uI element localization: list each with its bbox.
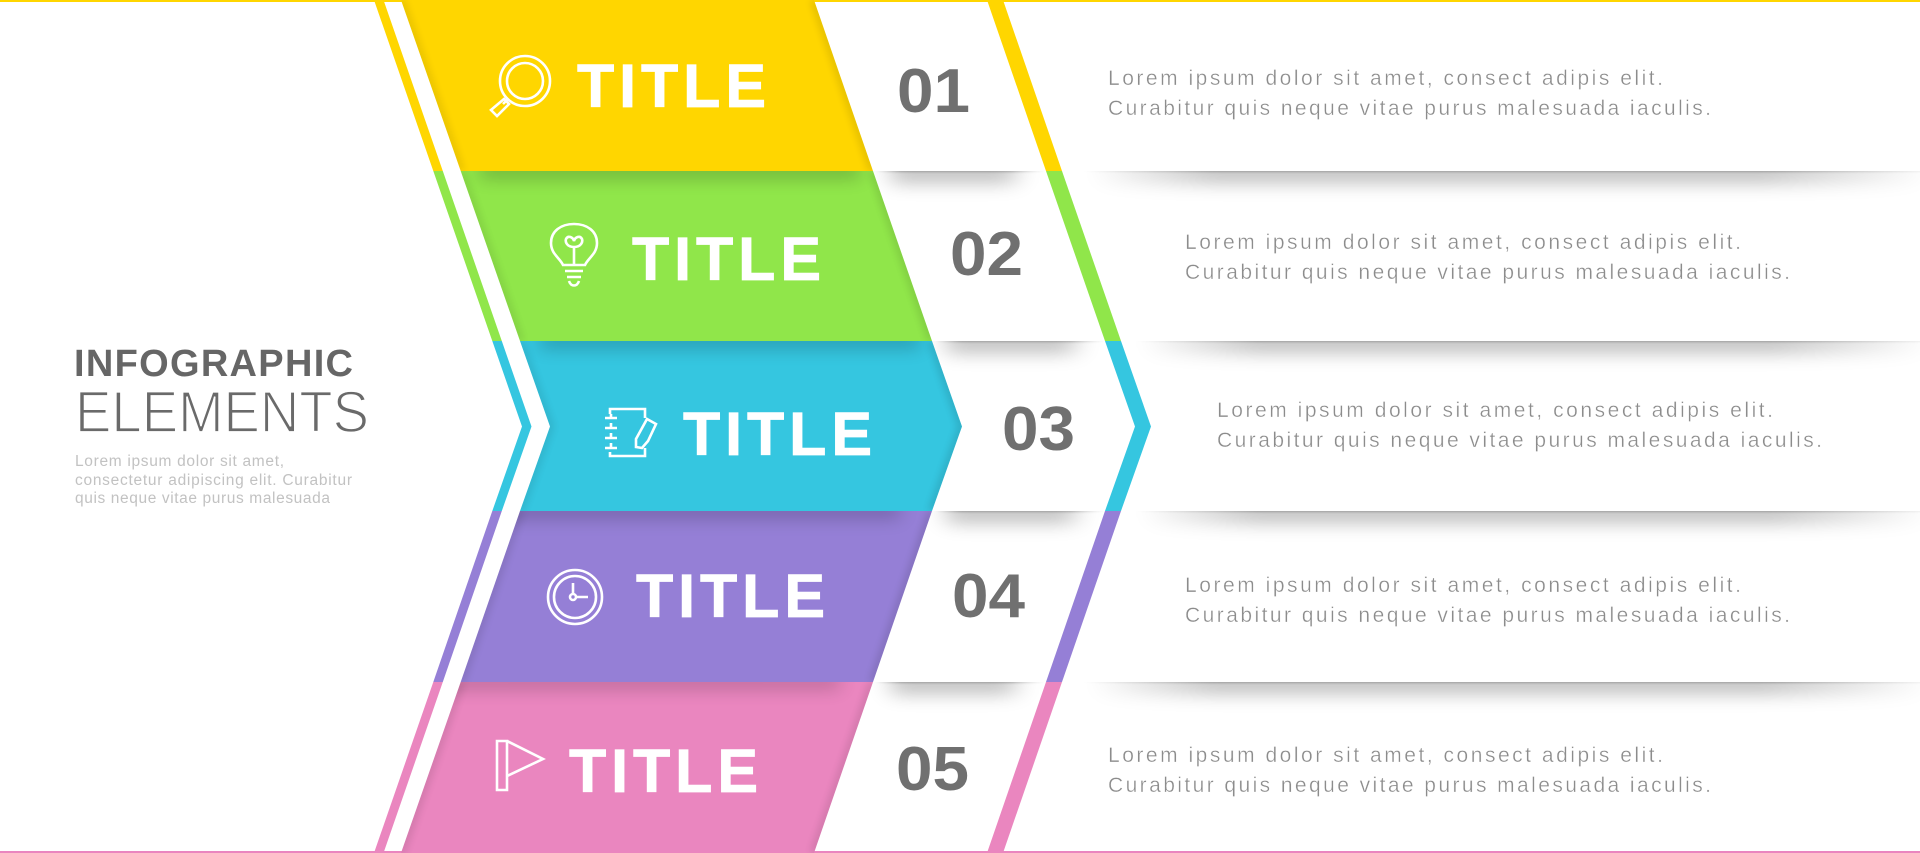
heading and intro text	[74, 343, 369, 507]
number: 04	[952, 562, 1026, 631]
intro paragraph	[75, 453, 352, 507]
number: 02	[950, 220, 1023, 289]
left stripe	[374, 0, 443, 171]
description	[1217, 399, 1822, 452]
right stripe	[1046, 171, 1121, 341]
row 3: cyan	[492, 333, 1822, 511]
band	[460, 171, 932, 341]
icon: clock	[548, 570, 602, 624]
icon: flag	[497, 741, 543, 790]
right stripe	[987, 0, 1062, 171]
bottom edge line	[0, 851, 1920, 853]
description: Curabitur quis neque vitae purus malesuada iaculis.	[1217, 429, 1822, 452]
description	[1108, 67, 1711, 120]
band	[520, 341, 962, 511]
band	[380, 0, 900, 171]
number: 03	[1002, 395, 1075, 464]
title text: TITLE	[636, 562, 825, 630]
intro paragraph: consectetur adipiscing elit. Curabitur	[75, 472, 352, 489]
right stripe	[1105, 341, 1151, 511]
row 1: yellow	[374, 0, 1711, 171]
description	[1185, 574, 1790, 627]
description: Lorem ipsum dolor sit amet, consect adipis elit.	[1185, 231, 1741, 254]
title text: TITLE	[683, 400, 872, 468]
panel shadows under rows	[875, 161, 1920, 694]
heading: infographic: INFOGRAPHIC	[74, 343, 353, 385]
left stripe	[433, 511, 502, 682]
description	[1185, 231, 1790, 284]
number: 05	[896, 735, 969, 804]
row 2: green	[433, 163, 1790, 341]
description: Curabitur quis neque vitae purus malesuada iaculis.	[1108, 97, 1711, 120]
description: Lorem ipsum dolor sit amet, consect adipis elit.	[1108, 67, 1663, 90]
band	[402, 682, 873, 853]
row 5: pink	[374, 674, 1711, 853]
left stripe	[374, 682, 443, 853]
title text: TITLE	[632, 225, 821, 293]
icon: light bulb	[551, 224, 597, 286]
left stripe	[492, 341, 532, 511]
intro paragraph: quis neque vitae purus malesuada	[75, 490, 330, 507]
right stripe	[1046, 511, 1121, 682]
number: 01	[897, 57, 970, 126]
description: Curabitur quis neque vitae purus malesuada iaculis.	[1185, 604, 1790, 627]
description: Lorem ipsum dolor sit amet, consect adipis elit.	[1185, 574, 1741, 597]
icon: magnifier	[491, 56, 550, 116]
band	[460, 511, 932, 682]
description: Lorem ipsum dolor sit amet, consect adipis elit.	[1108, 744, 1663, 767]
row 4: purple	[433, 503, 1790, 682]
left stripe	[433, 171, 502, 341]
intro paragraph: Lorem ipsum dolor sit amet,	[75, 453, 284, 470]
title text: TITLE	[569, 737, 758, 805]
description: Lorem ipsum dolor sit amet, consect adipis elit.	[1217, 399, 1773, 422]
right stripe	[987, 682, 1062, 853]
top edge line	[0, 0, 1920, 2]
description	[1108, 744, 1711, 797]
heading: elements: ELEMENTS	[75, 380, 369, 445]
title text: TITLE	[577, 52, 766, 120]
description: Curabitur quis neque vitae purus malesuada iaculis.	[1185, 261, 1790, 284]
icon: notebook and pencil	[605, 409, 656, 456]
description: Curabitur quis neque vitae purus malesuada iaculis.	[1108, 774, 1711, 797]
